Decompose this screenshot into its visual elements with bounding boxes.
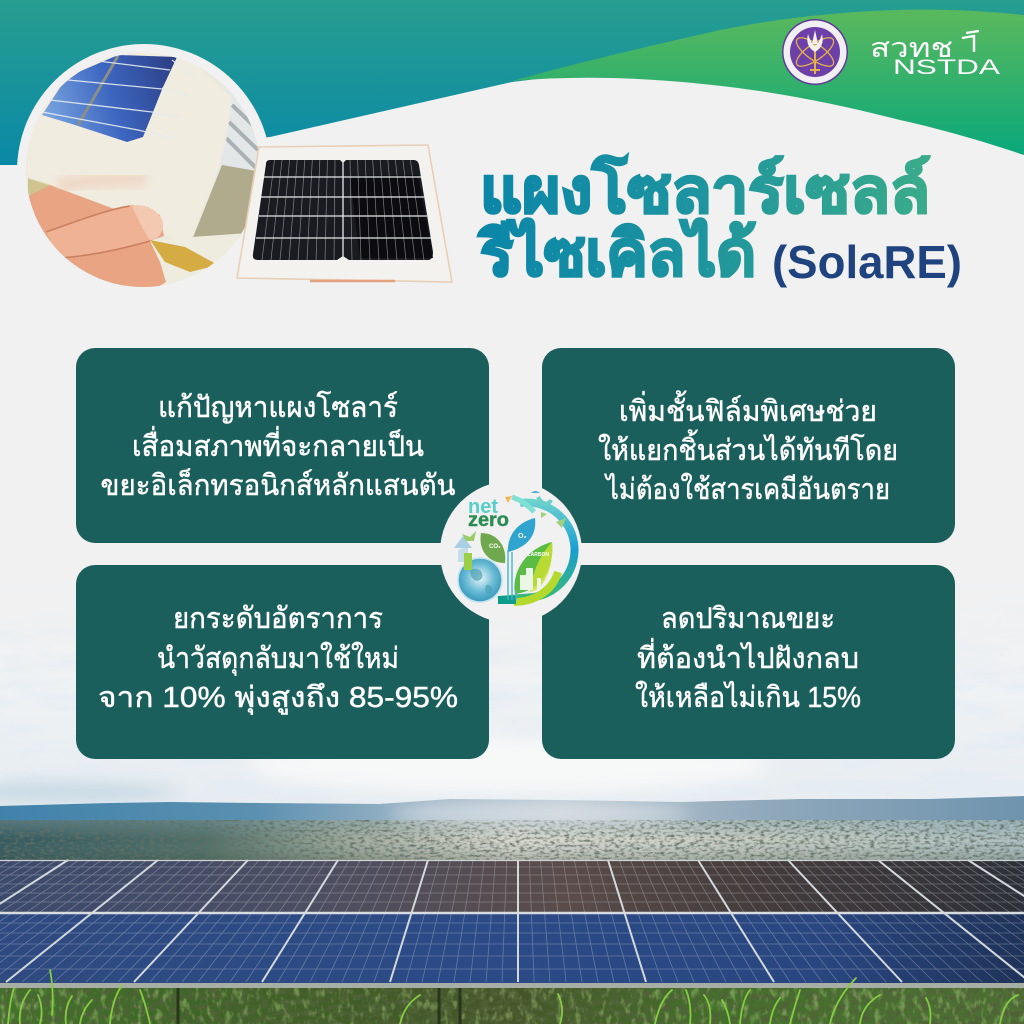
panel: special film card: เพิ่มชั้นฟิล์มพิเศษช่วย: [619, 390, 877, 428]
panel: recycling rate card: นำวัสดุกลับมาใช้ใหม่: [157, 641, 399, 676]
logo: NSTDA wordmark: สวทช: [870, 33, 953, 63]
panel cell grid: [0, 860, 1024, 982]
panel: problem card: แก้ปัญหาแผงโซลาร์: [158, 390, 398, 424]
panel: recycling rate card: จาก 10% พุ่งสูงถึง 85-95%: [98, 682, 458, 715]
panel: special film card: ไม่ต้องใช้สารเคมีอันตราย: [604, 472, 890, 506]
background window and table: [215, 90, 258, 180]
solar panel field: [0, 860, 1024, 1024]
mountains and distant city: [0, 796, 1024, 862]
photo: framed solar panel: [237, 145, 452, 282]
translucent film sheet: [28, 90, 232, 186]
central net zero badge: [440, 481, 582, 623]
central net zero badge: O₂: [518, 533, 527, 540]
panel: special film card: ให้แยกชิ้นส่วนได้ทันทีโดย: [598, 429, 898, 467]
text: net zero: net: [468, 496, 498, 518]
central net zero badge: CARBON: [527, 552, 549, 558]
central net zero badge: zero: [468, 510, 509, 531]
central net zero badge: CO₂: [489, 544, 501, 550]
panel: problem card: เสื่อมสภาพที่จะกลายเป็น: [132, 426, 424, 463]
header green wave: [512, 10, 1024, 155]
icon: O2 leaf: [508, 518, 535, 552]
icon: carbon city leaf: [514, 542, 552, 594]
logo: NSTDA science emblem: [782, 19, 848, 85]
title: (SolaRE): [772, 236, 962, 288]
panel: recycling rate card: ยกระดับอัตราการ: [173, 603, 383, 635]
panel: landfill card: ลดปริมาณขยะ: [661, 603, 835, 635]
icon: recycling arc: [498, 502, 575, 600]
logo: NSTDA wordmark: NSTDA: [893, 56, 1000, 79]
hand holding film: [27, 185, 166, 292]
icon: CO2 leaf: [480, 533, 505, 563]
icon: globe: [458, 558, 502, 602]
grass foreground: [0, 988, 1024, 1024]
panel rows: [0, 860, 1024, 913]
title: รีไซเคิลได้: [477, 218, 756, 289]
logo: NSTDA wordmark: [870, 31, 1000, 79]
panel: special film card: [542, 348, 955, 543]
panel: landfill card: ให้เหลือไม่เกิน 15%: [635, 680, 861, 714]
panel: problem card: [76, 348, 489, 543]
title: [477, 154, 962, 289]
panel: problem card: ขยะอิเล็กทรอนิกส์หลักแสนตัน: [100, 467, 456, 502]
title: แผงโซลาร์เซลล์: [480, 154, 930, 226]
panel: recycling rate card: [76, 565, 489, 759]
photo circle: recyclable film peeled from solar cell: [17, 44, 275, 298]
header teal wave: [0, 0, 1024, 165]
panel frames: [0, 860, 1024, 982]
panel: landfill card: [542, 565, 955, 759]
panel: landfill card: ที่ต้องนำไปฝังกลบ: [637, 638, 859, 675]
solar cell: [42, 55, 177, 142]
sky with clouds: [0, 560, 1024, 820]
icon: green arrow and butterflies: [458, 546, 468, 562]
